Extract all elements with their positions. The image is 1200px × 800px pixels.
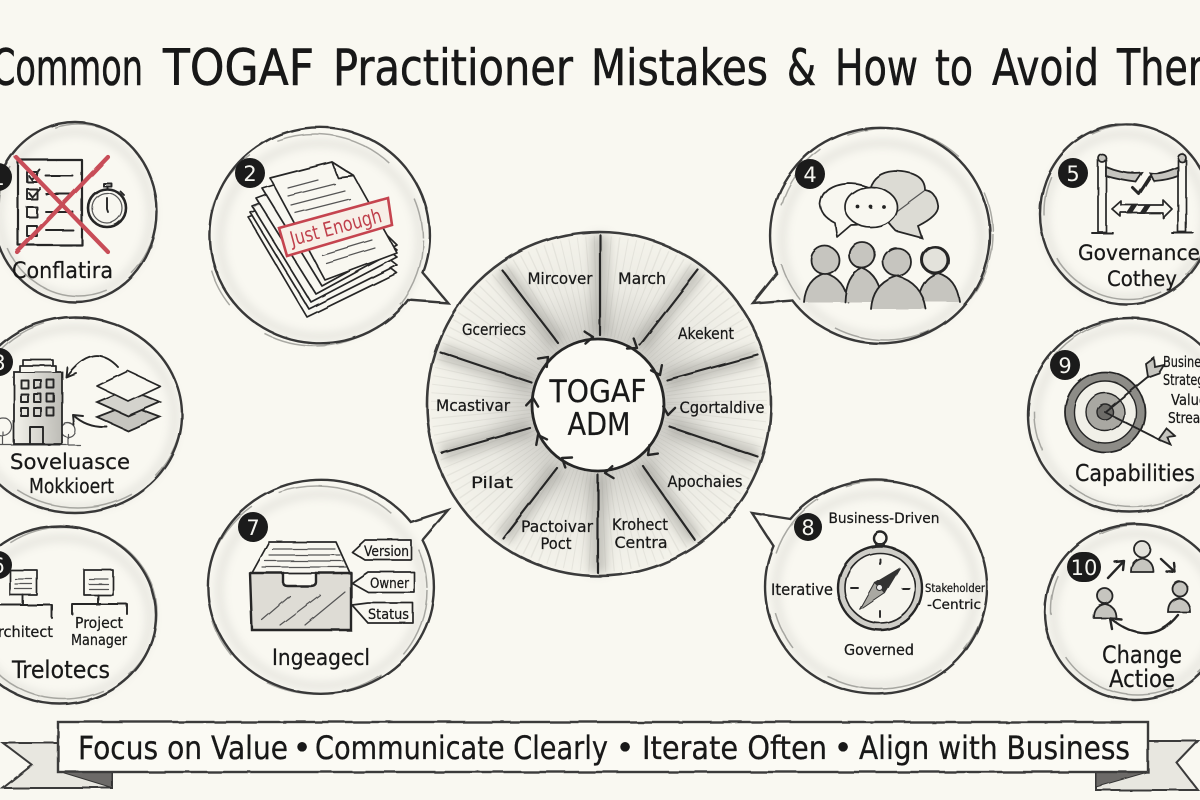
- ribbon tails and folds: [3, 722, 1198, 790]
- role labels: [0, 614, 128, 649]
- title: to: [935, 39, 973, 97]
- label: [10, 450, 130, 498]
- icon: audience of people: [804, 242, 960, 309]
- principle labels: -Centric: [927, 598, 981, 613]
- wheel segment labels: Mircover: [528, 269, 593, 288]
- label: Soveluasce: [10, 450, 130, 474]
- wheel segment labels: Krohect: [612, 515, 668, 534]
- wheel centre title: TOGAF: [549, 374, 646, 410]
- panel: mistake 9 capabilities target: [1028, 318, 1200, 512]
- icon: office building: [0, 360, 80, 445]
- icon: crossed-out checklist: [16, 157, 108, 252]
- metadata tags: [352, 540, 414, 623]
- wheel centre circle with cycle arrows: [526, 331, 675, 479]
- icon: speech bubbles: [820, 171, 938, 238]
- number badge 2: [235, 158, 265, 188]
- wheel segment labels: Pactoivar: [521, 517, 593, 536]
- panel: mistake 10 change action cycle: [1045, 524, 1200, 700]
- number badge 7: 7: [246, 516, 260, 540]
- number badge 1: [0, 163, 12, 191]
- wheel segment labels: Mcastivar: [436, 396, 510, 415]
- principle labels: Stakeholder: [925, 581, 985, 595]
- title: Avoid: [992, 39, 1099, 97]
- role labels: Project: [75, 614, 123, 632]
- wheel centre title: [549, 374, 646, 443]
- number badge 7: [238, 512, 268, 542]
- panel: mistake 2 just enough documentation: [207, 127, 448, 346]
- title: How: [835, 39, 918, 97]
- number badge 8: 8: [801, 516, 815, 540]
- banner text: •: [293, 729, 311, 767]
- title: Mistakes: [591, 39, 768, 97]
- number badge 9: [1050, 350, 1080, 380]
- banner text: Iterate Often: [642, 729, 827, 767]
- label: [1078, 241, 1200, 291]
- label: Change: [1102, 641, 1182, 669]
- label: Ingeagecl: [272, 646, 370, 671]
- wheel segment labels: Akekent: [678, 324, 734, 343]
- number badge 6: [0, 551, 12, 579]
- label: [1102, 641, 1182, 693]
- icon: target with arrows: [1065, 358, 1175, 452]
- wheel segment labels: [436, 269, 764, 553]
- banner text: [78, 729, 1130, 767]
- principle labels: [771, 511, 985, 659]
- number badge 5: [1058, 158, 1088, 188]
- wheel segment labels: Apochaies: [668, 472, 742, 491]
- wheel segment labels: Cgortaldive: [680, 398, 764, 417]
- title: [0, 39, 1200, 97]
- number badge 3: [0, 348, 13, 376]
- label: Conflatira: [12, 259, 113, 284]
- icon: stacked layers: [97, 371, 160, 431]
- panel: mistake 5 governance gate: [1040, 124, 1200, 304]
- stamp: just enough: Just Enough: [286, 203, 384, 251]
- title: &: [787, 39, 816, 97]
- icon: file drawer: [250, 542, 351, 630]
- panel: mistake 4 stakeholder communication: [753, 127, 993, 343]
- wheel segment labels: Pilat: [471, 473, 513, 492]
- number badge 5: 5: [1066, 162, 1080, 186]
- panel: central TOGAF ADM wheel: [427, 232, 771, 576]
- banner text: Communicate Clearly: [315, 729, 608, 767]
- banner text: •: [616, 729, 634, 767]
- wheel spoke shading: [440, 235, 758, 573]
- panel: mistake 7 file box and metadata: [207, 480, 448, 694]
- icon: stopwatch: [88, 183, 126, 227]
- principle labels: Business-Driven: [828, 511, 940, 527]
- label: Trelotecs: [11, 656, 110, 684]
- org chart icons: [0, 570, 127, 618]
- icon: ribbon barrier between posts: [1092, 154, 1193, 233]
- icon: people cycle: [1094, 541, 1190, 633]
- arrows between layers and building: [66, 356, 118, 427]
- metadata text: Version: [364, 544, 409, 560]
- wheel segment labels: Poct: [540, 534, 572, 553]
- metadata text: [364, 544, 409, 623]
- panel: mistake 8 principles compass: [752, 480, 987, 694]
- label: Mokkioert: [29, 474, 114, 498]
- principle labels: Iterative: [771, 580, 833, 599]
- banner text: Focus on Value: [78, 729, 288, 767]
- number badge 2: 2: [243, 162, 257, 186]
- number badge 10: 10: [1071, 556, 1097, 580]
- banner text: •: [834, 729, 852, 767]
- label: Actioe: [1109, 665, 1175, 693]
- number badge 10: [1067, 552, 1101, 582]
- metadata text: Status: [368, 607, 409, 623]
- strategy labels: [1163, 353, 1200, 427]
- number badge 4: 4: [803, 163, 817, 187]
- icon: paper stack: [248, 162, 397, 317]
- wheel radial hatching: [481, 286, 717, 522]
- number badge 9: 9: [1058, 354, 1072, 378]
- wheel segment labels: March: [618, 269, 666, 288]
- banner: key takeaways ribbon: [3, 722, 1198, 790]
- number badge 4: [795, 159, 825, 189]
- role labels: Manager: [71, 631, 128, 649]
- panel: mistake 1 conflating checklist: [0, 122, 157, 302]
- wheel segment labels: Centra: [614, 533, 668, 552]
- panel: mistake 3 building and layers: [0, 317, 182, 513]
- label: Cothey: [1107, 267, 1177, 291]
- number badge 8: [794, 513, 822, 541]
- panel: mistake 6 architect versus project manager: [0, 526, 157, 704]
- icon: compass: [838, 532, 922, 630]
- banner text: Align with Business: [859, 729, 1130, 767]
- wheel centre title: ADM: [568, 407, 630, 443]
- principle labels: Governed: [844, 641, 914, 659]
- wheel spokes: [440, 235, 758, 573]
- title: TOGAF: [162, 39, 314, 97]
- wheel segment labels: Gcerriecs: [462, 320, 526, 339]
- title: Practitioner: [333, 39, 573, 97]
- metadata text: Owner: [370, 576, 409, 592]
